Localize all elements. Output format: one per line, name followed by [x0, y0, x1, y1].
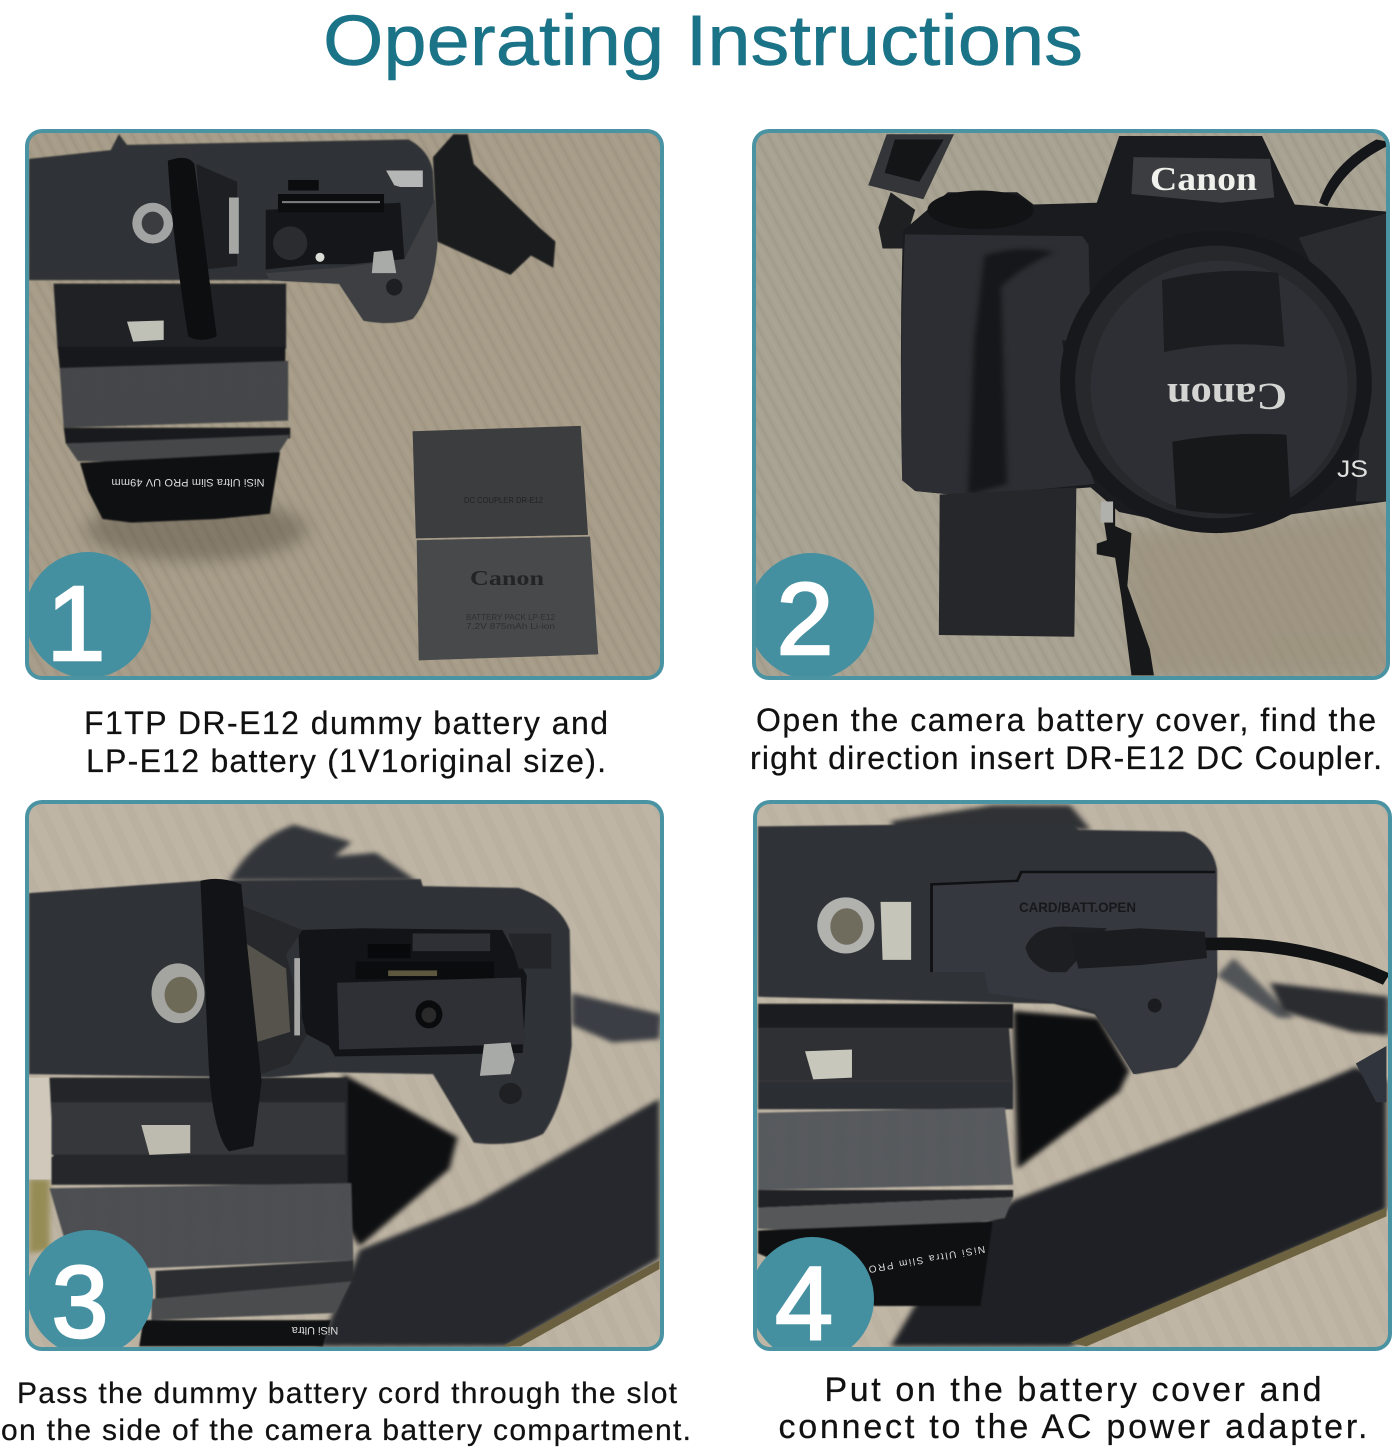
step badge 1: 1 — [47, 565, 105, 683]
step badge 4 — [757, 1237, 874, 1347]
step badge 2: 2 — [777, 562, 833, 676]
caption: step 3 — [1, 1377, 691, 1447]
caption: step 2: right direction insert DR-E12 DC Coupler. — [750, 740, 1382, 776]
panel: step 2 — [748, 129, 1390, 680]
viewfinder logo: Canon: Canon — [1150, 161, 1257, 198]
step badge 4: 4 — [775, 1246, 833, 1362]
lens filter text: NiSi Ultra Slim PRO UV 49mm — [112, 476, 264, 488]
battery label: LP-E12: BATTERY PACK LP-E12 — [466, 613, 556, 622]
battery logo: Canon: Canon — [470, 566, 544, 590]
caption: step 2: Open the camera battery cover, find the — [756, 702, 1376, 738]
caption: step 3: Pass the dummy battery cord through the slot — [17, 1377, 678, 1410]
step badge 1 — [25, 552, 151, 683]
title: Operating Instructions — [323, 2, 1083, 81]
battery label: DC coupler: DC COUPLER DR-E12 — [464, 496, 544, 505]
caption: step 4: Put on the battery cover and — [824, 1371, 1322, 1409]
battery label: LP-E12 — [466, 614, 554, 629]
caption: step 1: LP-E12 battery (1V1original size). — [86, 743, 606, 779]
photo: camera front — [868, 134, 1388, 677]
panel: step 3 — [25, 800, 664, 1359]
caption: step 4: connect to the AC power adapter. — [778, 1408, 1368, 1446]
caption: step 4 — [778, 1371, 1368, 1446]
panel: step 1 — [25, 129, 664, 683]
lens filter text: NiSi Ultra Slim PRO — [867, 1243, 986, 1274]
caption: step 2 — [750, 702, 1382, 776]
caption: step 1: F1TP DR-E12 dummy battery and — [84, 705, 608, 741]
camera model mark: JS — [1337, 456, 1368, 483]
panel: step 4 — [750, 800, 1392, 1362]
step badge 3 — [29, 1230, 153, 1347]
caption: step 3: on the side of the camera battery compartment. — [1, 1414, 691, 1447]
lens cap logo: Canon: Canon — [1167, 375, 1287, 417]
step badge 2 — [748, 553, 874, 679]
photo: camera and batteries — [29, 134, 598, 660]
caption: step 1 — [84, 705, 608, 779]
lens filter text: NiSi Ultra — [291, 1324, 338, 1336]
battery label: LP-E12: 7.2V 875mAh Li-ion — [466, 622, 555, 631]
photo: camera with dummy battery — [29, 825, 661, 1346]
battery cover label: CARD/BATT.OPEN — [1019, 899, 1136, 915]
step badge 3: 3 — [52, 1245, 108, 1359]
photo: camera with power cable — [758, 805, 1388, 1346]
